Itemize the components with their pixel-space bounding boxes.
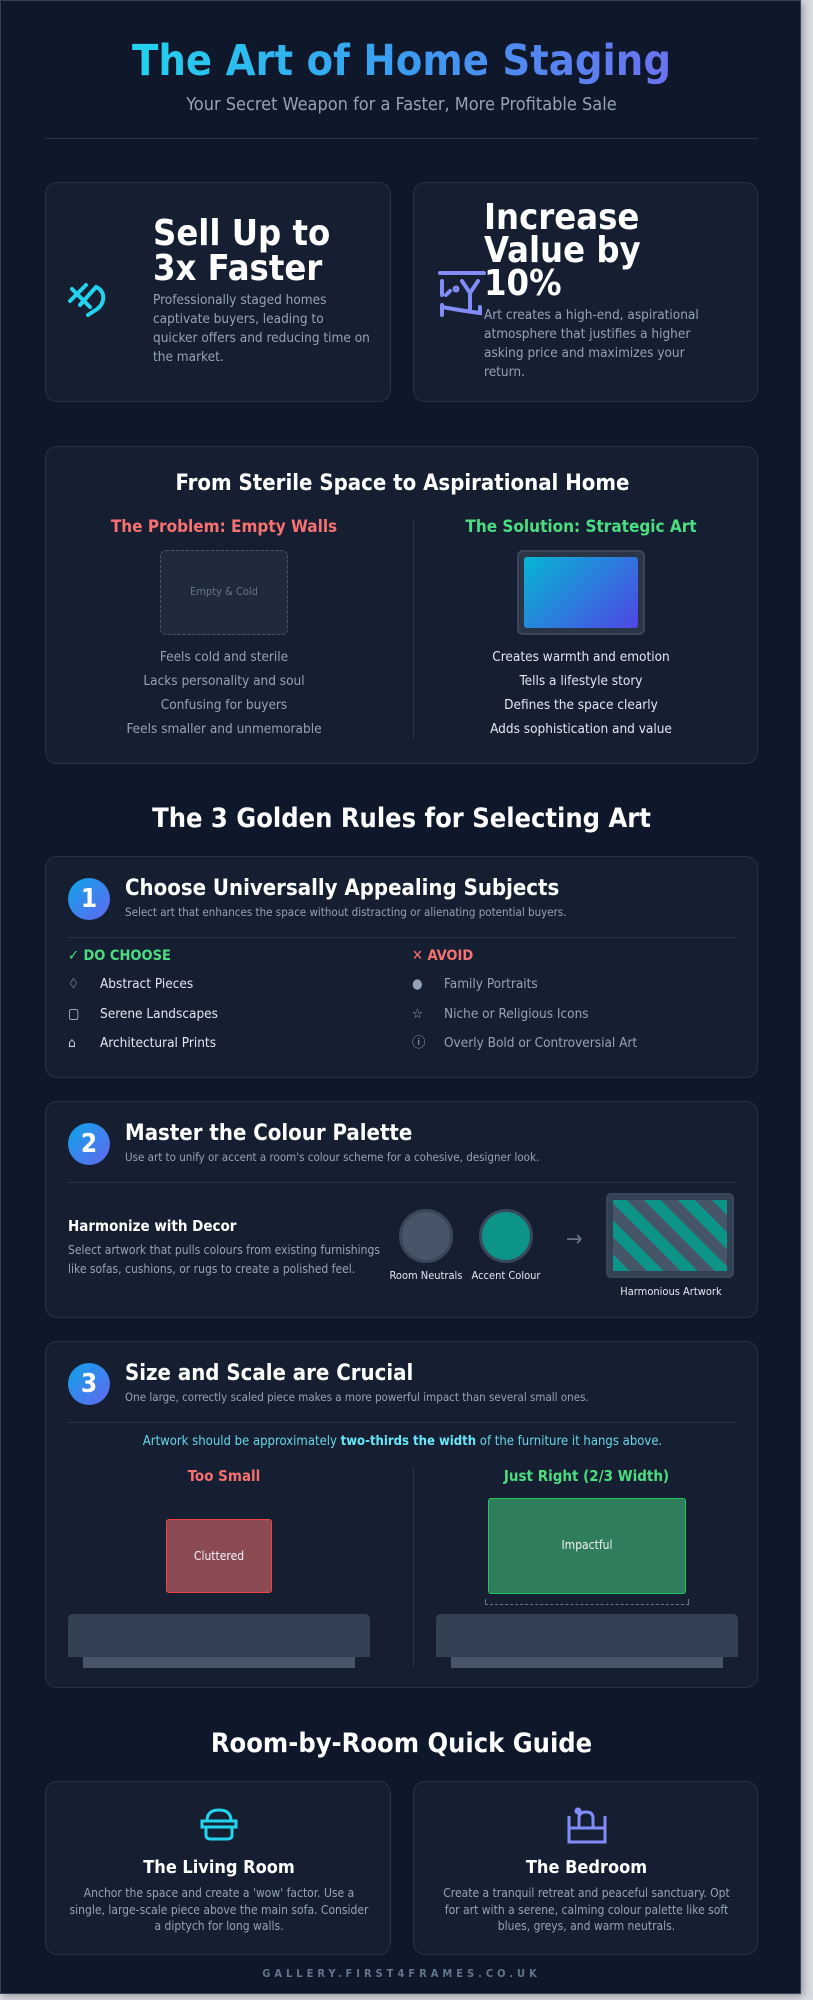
stat card: sell faster [45, 182, 391, 402]
solution column: Tells a lifestyle story [520, 673, 642, 689]
do choose list: ✓ DO CHOOSE [68, 948, 171, 964]
rule 2 heading: Master the Colour Palette [125, 1121, 412, 1146]
swatch: accent: Accent Colour [472, 1269, 540, 1282]
icon: bed [568, 1808, 606, 1844]
stat card: increase value [413, 182, 758, 402]
card: bedroom: Create a tranquil retreat and peaceful sanctuary. Opt for art with a serene, calming colour palette like soft blues, greys, and warm neutrals. [443, 1886, 730, 1933]
too small example: Too Small [188, 1467, 260, 1485]
art frame [517, 550, 645, 635]
do choose list: ⌂ [68, 1035, 76, 1051]
card: living room [45, 1781, 391, 1955]
harmonious artwork [606, 1193, 734, 1298]
rule 3 heading: Size and Scale are Crucial [125, 1361, 413, 1386]
icon: sofa [200, 1808, 238, 1840]
swatch: accent [472, 1209, 540, 1282]
badge 3: 3 [81, 1369, 97, 1399]
harmonious artwork: Harmonious Artwork [620, 1285, 722, 1298]
problem column: Feels cold and sterile [160, 649, 288, 665]
heading: golden rules: The 3 Golden Rules for Selecting Art [152, 803, 651, 834]
solution column: Creates warmth and emotion [492, 649, 670, 665]
badge 1: 1 [81, 884, 97, 914]
problem column: Lacks personality and soul [143, 673, 305, 689]
do choose list: ▢ [68, 1006, 79, 1022]
empty wall box: Empty & Cold [190, 585, 258, 598]
solution column: Defines the space clearly [504, 697, 658, 713]
panel: rule 2 [45, 1101, 758, 1318]
problem column: Feels smaller and unmemorable [126, 721, 322, 737]
stat text: value: Art creates a high-end, aspirational atmosphere that justifies a higher asking price and maximizes your return. [484, 307, 699, 380]
stat heading: 3x Faster [153, 248, 322, 289]
problem column: The Problem: Empty Walls [111, 517, 337, 537]
arrow: → [566, 1227, 583, 1252]
panel: rule 1: Select art that enhances the space without distracting or alienating potential buyers. [125, 905, 567, 919]
panel: rule 1 [45, 856, 758, 1078]
avoid list [412, 948, 637, 1051]
do choose list: Serene Landscapes [100, 1006, 218, 1022]
scale tip: Artwork should be approximately two-thirds the width of the furniture it hangs above. [143, 1434, 662, 1449]
avoid list: Family Portraits [444, 976, 538, 992]
stat heading: value: 10% [484, 263, 562, 304]
solution column: Adds sophistication and value [490, 721, 672, 737]
avoid list: ⓘ [412, 1035, 426, 1051]
empty wall box [160, 550, 288, 635]
avoid list: ☆ [412, 1006, 423, 1022]
harmonize text: Select artwork that pulls colours from existing furnishings like sofas, cushions, or rugs to create a polished feel. [68, 1243, 380, 1276]
card: bedroom [413, 1781, 758, 1955]
badge 3 [68, 1363, 110, 1405]
just right example: Impactful [562, 1538, 612, 1552]
do choose list: Architectural Prints [100, 1035, 216, 1051]
harmonize text: Harmonize with Decor [68, 1217, 236, 1235]
too small example [68, 1467, 370, 1668]
do choose list [68, 948, 218, 1051]
avoid list: Overly Bold or Controversial Art [444, 1035, 637, 1051]
too small example: Cluttered [194, 1549, 244, 1563]
stat heading: value: Increase [484, 197, 639, 238]
heading: room guide: Room-by-Room Quick Guide [211, 1728, 592, 1759]
panel: sterile vs aspirational [45, 446, 758, 764]
stat heading: value: Value by [484, 230, 641, 271]
swatch: neutrals: Room Neutrals [390, 1269, 462, 1282]
panel: rule 2: Use art to unify or accent a room's colour scheme for a cohesive, designer look. [125, 1150, 539, 1164]
just right example: Just Right (2/3 Width) [504, 1467, 669, 1485]
avoid list: ✕ AVOID [412, 948, 473, 964]
solution column [465, 517, 697, 737]
card: living room: The Living Room [143, 1857, 295, 1878]
footer: GALLERY.FIRST4FRAMES.CO.UK [262, 1967, 541, 1980]
do choose list: Abstract Pieces [100, 976, 193, 992]
panel: rule 3 [45, 1341, 758, 1688]
solution column: The Solution: Strategic Art [465, 517, 697, 537]
icon: value [438, 271, 486, 317]
problem column [110, 517, 337, 737]
stat heading: Sell Up to [153, 213, 330, 254]
stat heading: value [484, 197, 641, 304]
stat heading [153, 213, 330, 289]
icon: wave [68, 282, 106, 318]
badge 2 [68, 1123, 110, 1165]
title: The Art of Home Staging [132, 36, 671, 86]
harmonize text [68, 1217, 380, 1276]
problem column: Confusing for buyers [161, 697, 287, 713]
do choose list: ♢ [68, 976, 79, 992]
avoid list: ● [412, 976, 423, 992]
panel heading: From Sterile Space to Aspirational Home [176, 471, 629, 496]
rule 1 heading: Choose Universally Appealing Subjects [125, 876, 559, 901]
card: living room: Anchor the space and create a 'wow' factor. Use a single, large-scale piece above the main sofa. Consider a diptych for long walls. [70, 1886, 368, 1933]
card: bedroom: The Bedroom [526, 1857, 647, 1878]
badge 2: 2 [81, 1129, 97, 1159]
swatch: neutrals [390, 1209, 462, 1282]
panel: rule 3: One large, correctly scaled piece makes a more powerful impact than several small ones. [125, 1390, 589, 1404]
subtitle: Your Secret Weapon for a Faster, More Profitable Sale [186, 94, 617, 115]
avoid list: Niche or Religious Icons [444, 1006, 589, 1022]
just right example [436, 1467, 738, 1668]
badge 1 [68, 878, 110, 920]
stat text: Professionally staged homes captivate buyers, leading to quicker offers and reducing time on the market. [153, 292, 370, 365]
